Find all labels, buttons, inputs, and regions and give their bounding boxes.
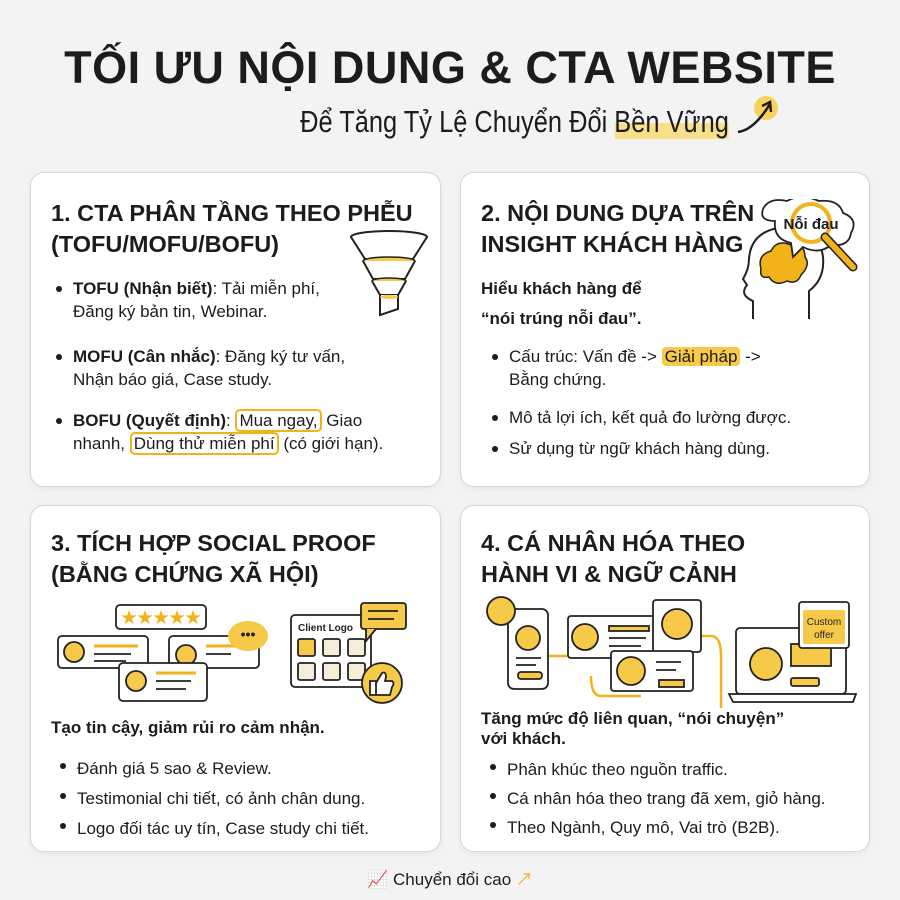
heading: HÀNH VI & NGỮ CẢNH <box>481 561 737 587</box>
bullet list: Đăng ký bản tin, Webinar. <box>73 302 267 321</box>
panel: funnel CTA <box>30 172 441 487</box>
bullet list: Cá nhân hóa theo trang đã xem, giỏ hàng. <box>507 789 826 808</box>
heading: 4. CÁ NHÂN HÓA THEO <box>481 530 745 556</box>
heading <box>51 200 413 257</box>
intro text <box>481 709 784 748</box>
subtitle: Để Tăng Tỷ Lệ Chuyển Đổi Bền Vững <box>300 104 729 139</box>
heading: INSIGHT KHÁCH HÀNG <box>481 231 743 257</box>
icon: client logo grid <box>290 602 407 704</box>
bullet list: nhanh, Dùng thử miễn phí (có giới hạn). <box>73 434 383 453</box>
bullet list: Theo Ngành, Quy mô, Vai trò (B2B). <box>507 818 780 837</box>
bullet list: BOFU (Quyết định): Mua ngay, Giao <box>73 411 362 430</box>
heading <box>51 530 376 587</box>
intro text: Hiểu khách hàng để <box>481 279 642 298</box>
heading <box>481 200 754 257</box>
bullet list: Bằng chứng. <box>509 370 606 389</box>
icon: head with magnifier <box>742 199 858 319</box>
icon: review cards: ••• <box>241 626 255 642</box>
heading: 3. TÍCH HỢP SOCIAL PROOF <box>51 530 376 556</box>
bullet list: TOFU (Nhận biết): Tải miễn phí, <box>73 279 320 298</box>
bullet list: Nhận báo giá, Case study. <box>73 370 272 389</box>
panel: social proof <box>30 505 441 852</box>
bullet list: Đánh giá 5 sao & Review. <box>77 759 272 778</box>
icon: arrow <box>738 96 778 134</box>
icon: head with magnifier: Nỗi đau <box>784 216 838 233</box>
heading: 2. NỘI DUNG DỰA TRÊN <box>481 200 754 226</box>
icon: client logo grid: Client Logo <box>298 623 353 634</box>
bullet list <box>492 347 791 458</box>
bullet list <box>60 759 369 838</box>
heading <box>481 530 745 587</box>
bullet list: Mô tả lợi ích, kết quả đo lường được. <box>509 408 791 427</box>
footer: 📈 Chuyển đổi cao ↗ <box>367 870 533 889</box>
icon: device personalization flow: offer <box>814 630 835 641</box>
bullet list: Cấu trúc: Vấn đề -> Giải pháp -> <box>509 347 761 366</box>
bullet list <box>56 279 383 455</box>
intro text <box>481 279 642 328</box>
icon: review cards <box>57 604 268 702</box>
intro text: Tăng mức độ liên quan, “nói chuyện” <box>481 709 784 728</box>
bullet list: Sử dụng từ ngữ khách hàng dùng. <box>509 439 770 458</box>
intro text: với khách. <box>481 729 566 748</box>
bullet list: MOFU (Cân nhắc): Đăng ký tư vấn, <box>73 347 345 366</box>
heading: (TOFU/MOFU/BOFU) <box>51 231 279 257</box>
title: TỐI ƯU NỘI DUNG & CTA WEBSITE <box>64 42 836 93</box>
bullet list: Phân khúc theo nguồn traffic. <box>507 760 728 779</box>
heading: 1. CTA PHÂN TẦNG THEO PHỄU <box>51 200 413 226</box>
bullet list: Testimonial chi tiết, có ảnh chân dung. <box>77 789 365 808</box>
icon: review cards: ★★★★★ <box>121 610 201 627</box>
icon: funnel <box>350 230 428 316</box>
icon: device personalization flow: Custom <box>807 617 841 628</box>
intro text: “nói trúng nỗi đau”. <box>481 309 642 328</box>
intro text: Tạo tin cậy, giảm rủi ro cảm nhận. <box>51 718 325 737</box>
panel: personalization <box>460 505 870 852</box>
bullet list <box>490 760 826 837</box>
heading: (BẰNG CHỨNG XÃ HỘI) <box>51 561 319 587</box>
bullet list: Logo đối tác uy tín, Case study chi tiết. <box>77 819 369 838</box>
panel: insight <box>460 172 870 487</box>
icon: device personalization flow <box>486 596 858 708</box>
